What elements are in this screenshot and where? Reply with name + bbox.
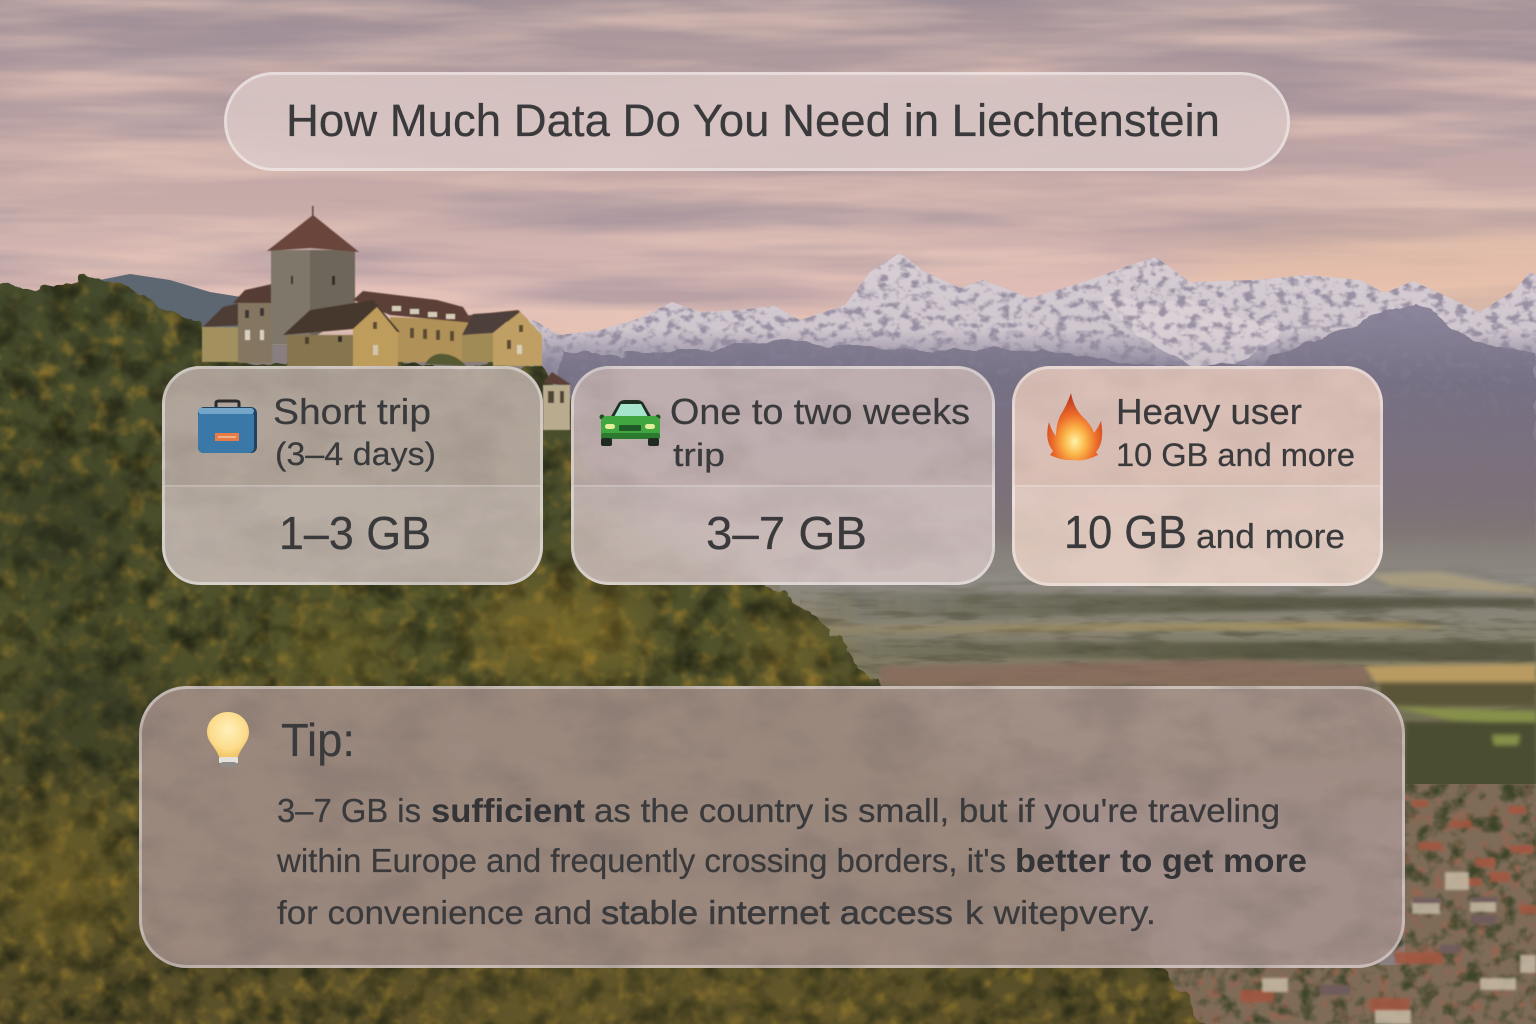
title pill: [224, 72, 1290, 171]
icon: car: [600, 400, 660, 446]
snowy mountain range: [520, 240, 1536, 610]
icon: light bulb: [207, 712, 249, 767]
heading: heavy user: Heavy user: [1116, 391, 1302, 432]
panel: heavy user: [1012, 366, 1383, 586]
heading: one to two weeks: One to two weeks: [670, 391, 970, 432]
tip body text: better to get more: [1015, 842, 1307, 879]
tip body text: [276, 792, 1307, 931]
town with rooftops: [1130, 784, 1536, 1024]
subheading: 10 GB and more: 10 GB and more: [1116, 437, 1355, 473]
tip body text: for convenience and: [277, 894, 592, 931]
tip body text: 3–7 GB is: [277, 792, 421, 829]
tip body text: sufficient: [431, 792, 585, 829]
icon: flame: [1047, 393, 1102, 460]
sky with clouds: [0, 0, 1536, 345]
tip heading: Tip:: [281, 714, 355, 766]
icon: suitcase: [198, 401, 257, 453]
forested hill: [0, 278, 1240, 1024]
tip body text: stable internet access: [601, 894, 953, 931]
panel: short trip: [162, 366, 543, 585]
subheading: trip: trip: [673, 437, 725, 473]
castle on hilltop: [202, 206, 570, 430]
value: 10 GB: 10 GB: [1064, 506, 1187, 558]
value: 3-7 GB: 3–7 GB: [706, 507, 867, 559]
tip body text: within Europe and frequently crossing borders, it's: [276, 842, 1006, 879]
tip body text: as the country is small, but if you're traveling: [594, 792, 1280, 829]
far hill left: [40, 274, 260, 330]
heading: short trip: Short trip: [273, 391, 431, 432]
value: and more: and more: [1196, 518, 1345, 556]
autumn colour patches on hill: [0, 460, 1000, 1020]
tip body text: k witepvery.: [965, 894, 1156, 931]
panel: one to two weeks: [571, 366, 995, 585]
value: 1-3 GB: 1–3 GB: [279, 507, 431, 559]
subheading: days: (3–4 days): [275, 436, 436, 472]
panel: tip: [139, 686, 1405, 968]
title text: How Much Data Do You Need in Liechtenstein: [286, 95, 1220, 146]
valley with fields: [780, 552, 1536, 790]
